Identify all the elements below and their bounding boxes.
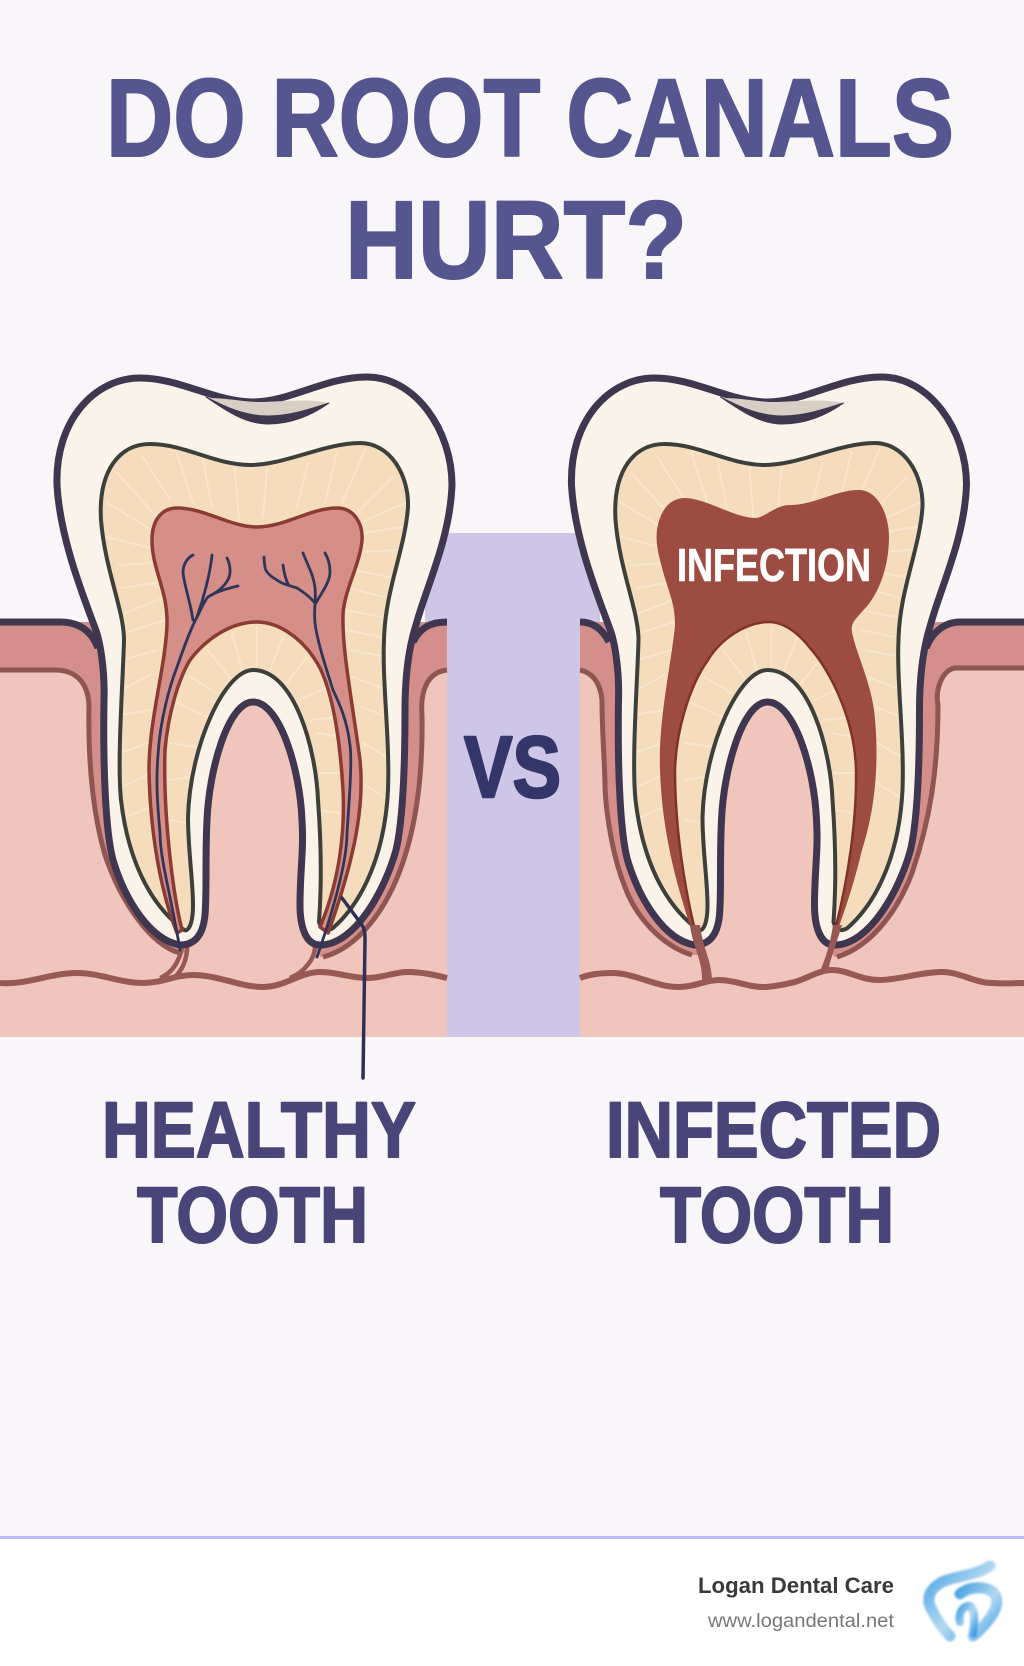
vs divider band bbox=[425, 533, 600, 1037]
label: infected tooth: INFECTED bbox=[606, 1085, 941, 1174]
label: healthy tooth: TOOTH bbox=[137, 1170, 368, 1259]
title: HURT? bbox=[345, 179, 687, 302]
infected gum tissue bbox=[580, 622, 1024, 1037]
icon: logo tooth bbox=[929, 1566, 997, 1636]
healthy gum tissue bbox=[0, 622, 447, 1037]
healthy root tip vessels bbox=[160, 943, 315, 978]
website: www.logandental.net bbox=[707, 1610, 895, 1632]
healthy pulp chamber bbox=[149, 508, 362, 933]
callout line bbox=[342, 898, 365, 1078]
panel: infected tooth bbox=[571, 377, 1024, 1037]
healthy left nerve bbox=[157, 555, 238, 950]
infection label: INFECTION bbox=[677, 539, 871, 591]
label: healthy tooth: HEALTHY bbox=[102, 1085, 416, 1174]
infected tooth body bbox=[571, 377, 966, 945]
infected jaw line bbox=[580, 970, 1024, 987]
infected pulp bbox=[657, 490, 889, 932]
brand name: Logan Dental Care bbox=[698, 1573, 894, 1598]
label: healthy tooth bbox=[102, 1085, 416, 1259]
healthy tooth body bbox=[57, 377, 452, 945]
vs label: VS bbox=[464, 719, 561, 816]
label: infected tooth: TOOTH bbox=[660, 1170, 894, 1259]
infected inner pulp edge bbox=[675, 622, 856, 930]
infected root tip vessels bbox=[690, 925, 842, 982]
healthy right nerve bbox=[264, 553, 351, 957]
label: infected tooth bbox=[606, 1085, 941, 1259]
title bbox=[106, 57, 954, 302]
healthy jaw line bbox=[0, 972, 447, 987]
footer bbox=[0, 1536, 1024, 1666]
panel: healthy tooth bbox=[0, 377, 452, 1078]
